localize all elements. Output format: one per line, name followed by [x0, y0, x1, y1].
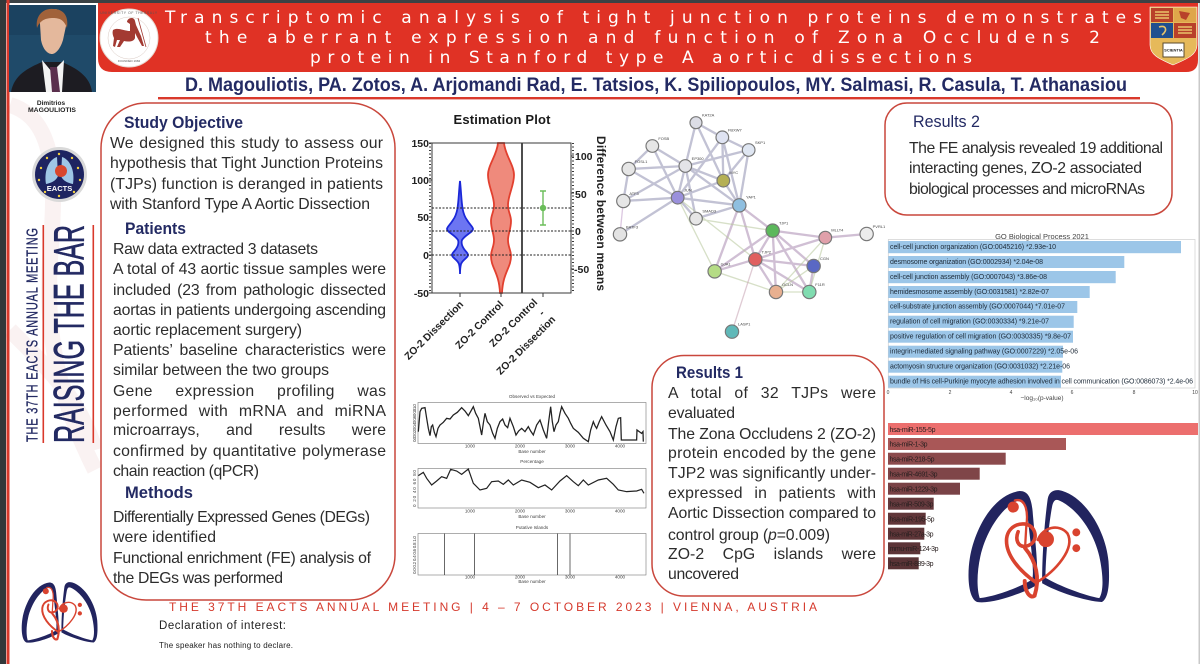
bar labels: integrin-mediated signaling pathway (GO:0007229) *2.05e-06 [890, 348, 1078, 356]
axes [429, 143, 574, 297]
plot: putative islands: 3000 [565, 574, 576, 580]
difference marker [540, 191, 546, 225]
x axis: 4 [1010, 390, 1013, 396]
bar labels: hsa-miR-1229-3p [890, 486, 938, 494]
plot: percentage: Base number [518, 514, 546, 519]
university logo: FOUNDED 1984 [118, 59, 140, 63]
x axis [887, 390, 1198, 396]
chart: protein interaction network: JUN [684, 187, 692, 192]
panel: results 2 [885, 103, 1172, 215]
reference lines [432, 208, 571, 255]
speaker photo [9, 5, 96, 92]
icon: lungs and clef logo, right [969, 490, 1109, 602]
bar labels: cell-substrate junction assembly (GO:0007044) *7.01e-07 [890, 304, 1065, 311]
text block: patients: confirmed by quantitative polymerase [113, 443, 386, 460]
panel: study objective, patients, methods [101, 103, 395, 600]
bar labels: hsa-miR-509-3p [890, 502, 934, 508]
plot: observed vs expected: 2000 [515, 444, 526, 448]
plot: percentage: 3000 [565, 508, 576, 514]
bar labels: hsa-miR-4691-3p [890, 472, 938, 478]
plot: percentage: Percentage [520, 459, 544, 464]
chart: protein interaction network: FOSL1 [635, 159, 648, 164]
plot: putative islands: Putative Islands [516, 525, 549, 530]
text block: patients: Patients’ baseline characteristics were [113, 342, 386, 359]
violin: dissection [447, 181, 473, 274]
chart: protein interaction network: LASP1 [738, 322, 751, 327]
text block: results 1: TJP2 was significantly under- [668, 465, 876, 482]
text block: results 1 [668, 385, 876, 583]
bar labels: cell-cell junction organization (GO:0045216) *2.93e-10 [890, 244, 1056, 251]
x axis: 6 [1071, 390, 1074, 396]
bar labels [890, 427, 939, 568]
text block: results 2: The FE analysis revealed 19 additional [909, 140, 1163, 157]
bar labels: desmosome organization (GO:0002934) *2.04e-08 [890, 259, 1043, 266]
category labels: ZO-2 Control [454, 299, 506, 352]
plot: observed vs expected: 0.00 0.20 0.40 0.60 0.81.0 [412, 404, 417, 442]
bar labels: regulation of cell migration (GO:0030334) *9.21e-07 [890, 319, 1049, 326]
x axis: 2 [949, 390, 952, 396]
university logo [100, 9, 158, 67]
x axis: 0 [887, 390, 890, 396]
bar labels: positive regulation of cell migration (GO:0030335) *9.8e-07 [890, 334, 1071, 340]
plot: percentage: 4000 [615, 508, 626, 514]
faint background swirl [10, 105, 95, 470]
chart: estimation plot [403, 112, 608, 378]
chart: protein interaction network: KAT2A [702, 113, 715, 118]
plot: observed vs expected: Observed vs Expected [509, 394, 556, 399]
x axis: 8 [1133, 390, 1136, 396]
chart: protein interaction network: SMAD3 [702, 209, 717, 214]
bars [888, 241, 1181, 388]
chart: protein interaction network: CGN [820, 256, 829, 261]
axis labels: 100 [411, 175, 429, 187]
speaker name: MAGOULIOTIS [28, 107, 76, 114]
chart: protein interaction network: TJP1 [779, 220, 789, 225]
text block: patients: Raw data extracted 3 datasets [113, 241, 318, 258]
bar labels: mmu-miR-124-3p [890, 546, 939, 553]
plot: observed vs expected [412, 394, 646, 454]
right axis title: Difference between means [594, 136, 608, 291]
chart: protein interaction network: FOSB [658, 136, 670, 141]
heading: study objective: Study Objective [124, 114, 243, 132]
chart: GO biological process [887, 232, 1198, 402]
text block: patients: aortas in patients undergoing ascending [113, 302, 386, 319]
chart: protein interaction network: BATF3 [626, 224, 639, 229]
bar labels: hsa-miR-218-5p [890, 456, 935, 464]
plot: observed vs expected: 3000 [565, 444, 576, 448]
plot: putative islands: 4000 [615, 574, 626, 580]
axis labels: 0 [423, 250, 429, 262]
text block: results 1: protein encoded by the gene [668, 445, 876, 462]
axis labels: 100 [575, 151, 593, 163]
bar labels: actomyosin structure organization (GO:0031032) *2.21e-06 [890, 363, 1070, 370]
axis labels: 150 [411, 138, 429, 150]
text block: methods: Functional enrichment (FE) analysis of [113, 550, 372, 567]
bar labels: hsa-miR-195-5p [890, 516, 935, 524]
bar labels: bundle of His cell-Purkinje myocyte adhesion involved in cell communication (GO:0086073) *2.4e-06 [890, 378, 1193, 385]
plot: observed vs expected: Base number [518, 449, 546, 454]
text block: results 2: interacting genes, ZO-2 associated [909, 160, 1142, 177]
text block: patients: included (23 from pathologic dissected [113, 282, 386, 299]
axis labels: -50 [414, 288, 429, 300]
text block: results 1: uncovered [668, 566, 739, 583]
axis labels [411, 138, 593, 300]
heading: results 2: Results 2 [913, 113, 980, 131]
authors: D. Magouliotis, PA. Zotos, A. Arjomandi Rad, E. Tatsios, K. Spiliopoulos, MY. Salmasi, R. Casula, T. Athanasiou [185, 74, 1127, 96]
bar labels: cell-cell junction assembly (GO:0007043) *3.86e-08 [890, 274, 1047, 281]
category labels: ZO-2 Dissection [403, 299, 466, 363]
speaker name: Dimitrios [37, 100, 65, 107]
text block: objective: with Stanford Type A Aortic Dissection [109, 196, 370, 213]
text block: patients: microarrays, and results were [113, 422, 386, 439]
plot: percentage [412, 459, 646, 519]
text block: results 1: evaluated [668, 405, 735, 422]
university logo: UNIVERSITY OF THESSALY [100, 11, 158, 15]
plot: percentage: 0 20 40 60 80 [412, 470, 417, 507]
text block: patients [113, 241, 386, 480]
chart: CpG island plots [412, 394, 646, 584]
chart: protein interaction network: MLLT4 [831, 227, 844, 232]
text block: results 2: biological processes and microRNAs [909, 181, 1145, 198]
chart: protein interaction network [613, 113, 886, 338]
text block: results 1: The Zona Occludens 2 (ZO-2) [668, 426, 876, 443]
icon: coat of arms shield [1150, 7, 1197, 65]
violin: control [488, 143, 514, 293]
bar labels: hemidesmosome assembly (GO:0031581) *2.82e-07 [890, 289, 1049, 296]
text block: results 2 [909, 140, 1163, 198]
chart: protein interaction network: SKP1 [755, 140, 766, 145]
declaration of interest: Declaration of interest: [159, 620, 286, 632]
bar labels: hsa-miR-1-3p [890, 442, 928, 449]
category labels [403, 297, 558, 378]
plot: putative islands: Base number [518, 579, 546, 584]
icon: lungs and clef logo, left [22, 582, 98, 643]
title [164, 8, 1142, 68]
chart: protein interaction network: FBXW7 [728, 127, 742, 132]
text block: methods: were identified [112, 529, 216, 546]
bar labels: hsa-miR-889-3p [890, 561, 934, 568]
text block: objective: hypothesis that Tight Junction Proteins [110, 155, 383, 172]
EACTS logo: EACTS [47, 184, 72, 193]
title: the aberrant expression and function of Zona Occludens 2 [205, 28, 1100, 48]
declaration of interest: The speaker has nothing to declare. [159, 641, 293, 650]
text block: results 1: A total of 32 TJPs were [668, 385, 876, 402]
text block: objective [109, 135, 383, 213]
bars [888, 423, 1198, 569]
plot: putative islands: 2000 [515, 574, 526, 580]
plot: percentage: 1000 [465, 508, 476, 514]
plot: putative islands: 1000 [465, 574, 476, 580]
text block: patients: Gene expression profiling was [113, 383, 386, 400]
declaration of interest [159, 620, 293, 650]
axis labels: 50 [417, 212, 429, 224]
text block: results 1: expressed in patients with [668, 485, 876, 502]
bar labels: hsa-miR-155-5p [890, 427, 936, 434]
axis labels: 50 [575, 189, 587, 201]
meeting footer: THE 37TH EACTS ANNUAL MEETING | 4 – 7 OCTOBER 2023 | VIENNA, AUSTRIA [169, 600, 817, 614]
plot: observed vs expected: 4000 [615, 444, 626, 448]
text block: patients: performed with mRNA and miRNA [113, 403, 386, 420]
text block: objective: (TJPs) function is deranged in patients [110, 176, 383, 193]
panel: results 1 [652, 356, 884, 596]
bar labels [890, 244, 1193, 385]
title: protein in Stanford type A aortic dissections [310, 48, 972, 68]
chart: protein interaction network: F11R [815, 282, 825, 287]
speaker name [28, 100, 76, 114]
axis labels: 0 [575, 226, 581, 238]
chart: protein interaction network: PVRL1 [873, 224, 886, 229]
text block: objective: We designed this study to assess our [110, 135, 383, 152]
plot: putative islands: 0.0 0.2 0.4 0.6 0.8 1.0 [412, 536, 417, 574]
chart title: Estimation Plot [454, 112, 551, 127]
chart: protein interaction network: MYC [729, 170, 738, 175]
vertical slogan: raising the bar: RAISING THE BAR [46, 225, 94, 443]
chart: protein interaction network: YAP1 [746, 195, 757, 200]
x axis: 10 [1192, 390, 1198, 396]
text block: patients: similar between the two groups [113, 362, 329, 379]
EACTS logo [32, 147, 87, 202]
title: Transcriptomic analysis of tight junction proteins demonstrates [164, 8, 1142, 28]
text block: patients: aortic replacement surgery) [113, 322, 302, 339]
text block: patients: chain reaction (qPCR) [113, 463, 259, 480]
text block: results 1: Aortic Dissection compared to [668, 505, 876, 522]
text block: methods [112, 509, 372, 587]
chart: GO biological process: −log₁₀(p-value) [1020, 395, 1064, 402]
category labels: - [537, 308, 548, 319]
chart: protein interaction network: EP300 [692, 156, 704, 161]
vertical meeting title: THE 37TH EACTS ANNUAL MEETING [24, 228, 41, 442]
text block: methods: Differentially Expressed Genes (DEGs) [113, 509, 370, 526]
plot: putative islands [412, 525, 646, 584]
heading: results 1: Results 1 [676, 364, 743, 382]
chart: GO biological process: GO Biological Process 2021 [995, 232, 1089, 241]
axis labels: -50 [574, 264, 589, 276]
chart: protein interaction network: ATF3 [629, 191, 640, 196]
chart: protein interaction network: GJA1 [721, 261, 731, 266]
bar labels: hsa-miR-27a-3p [890, 532, 934, 538]
heading: patients: Patients [125, 220, 186, 238]
text block: patients: A total of 43 aortic tissue samples were [113, 261, 386, 278]
heading: methods: Methods [125, 484, 193, 502]
text block: results 1: control group (p=0.009) [668, 527, 830, 544]
header banner [98, 3, 1198, 72]
chart: protein interaction network: TJP2 [762, 249, 772, 254]
text block: results 1: ZO-2 CpG islands were [668, 546, 876, 563]
chart: microRNA bars [888, 423, 1198, 569]
chart: protein interaction network: OCLN [782, 282, 793, 287]
plot: observed vs expected: 1000 [465, 444, 476, 448]
plot: percentage: 2000 [515, 508, 526, 514]
text block: methods: the DEGs was performed [113, 570, 283, 587]
category labels: ZO-2 Control [488, 297, 540, 350]
category labels: ZO-2 Dissection [495, 314, 558, 378]
icon: coat of arms shield: SCIENTIA [1164, 48, 1183, 52]
